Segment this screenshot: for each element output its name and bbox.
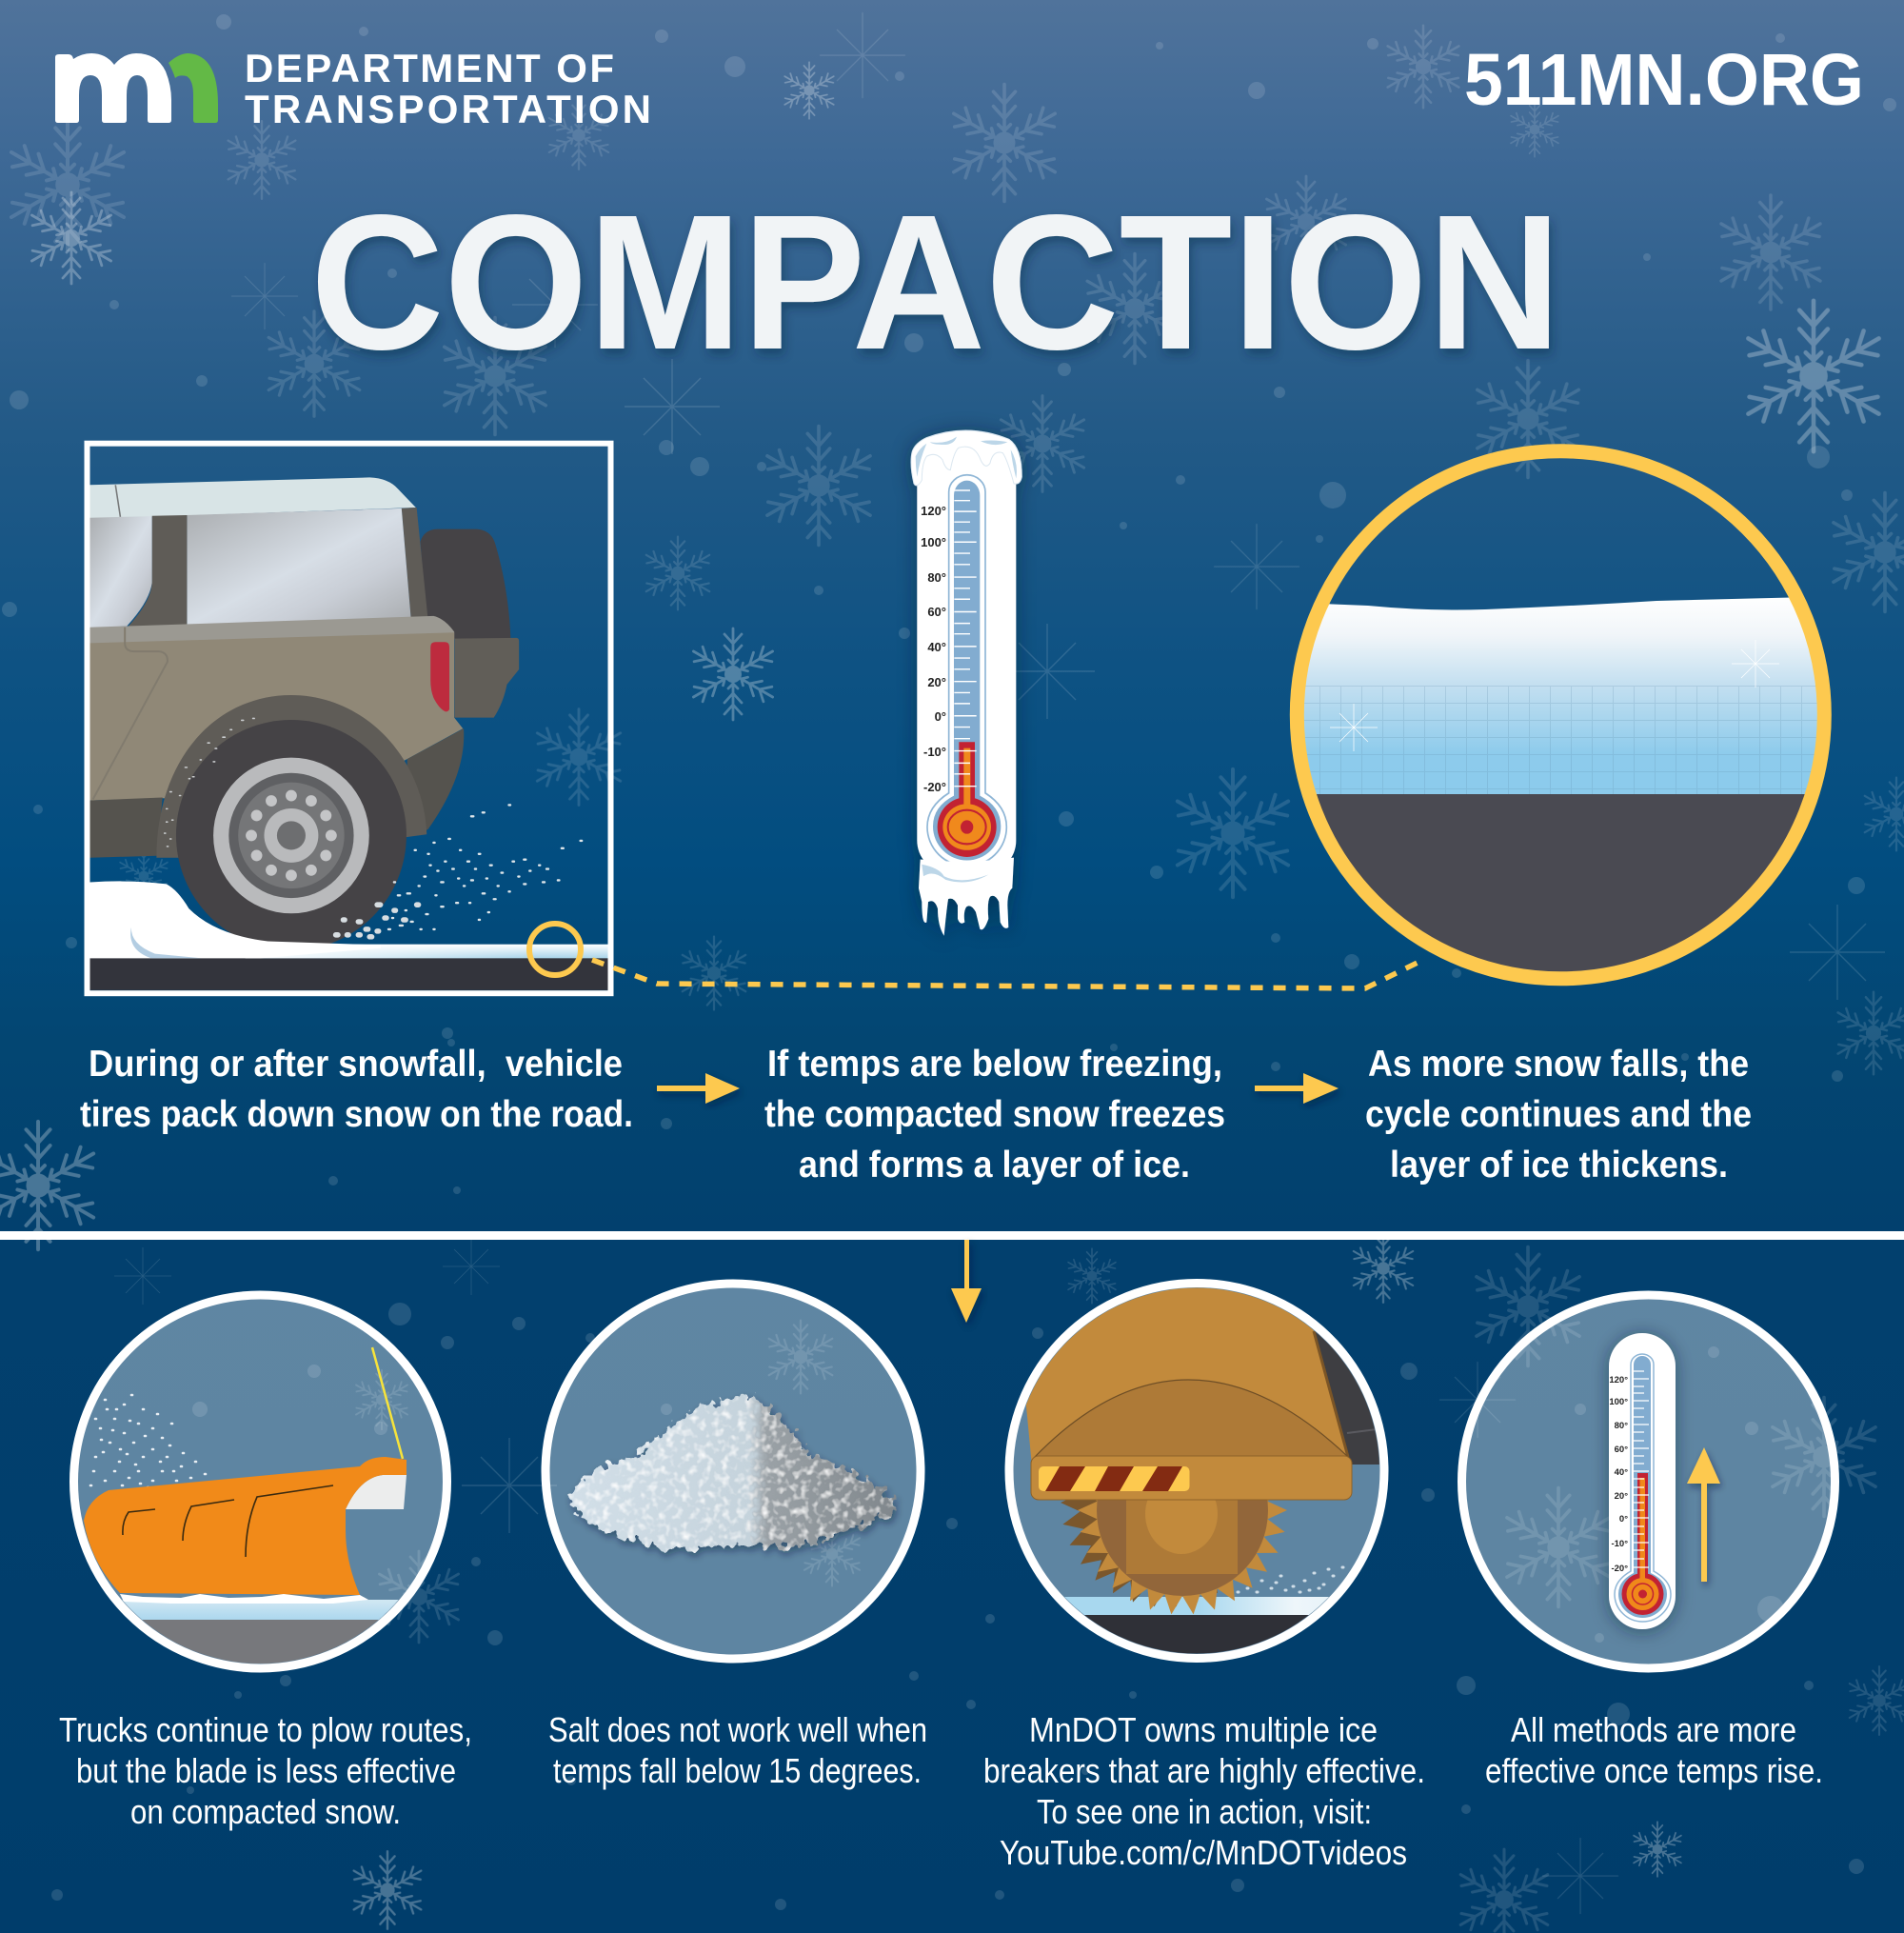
- caption: salt: temps fall below 15 degrees.: [553, 1751, 922, 1790]
- road: [89, 958, 608, 991]
- heading: department of transportation: TRANSPORTATION: [245, 87, 651, 131]
- step 2 text: If temps are below freezing,: [767, 1044, 1222, 1085]
- caption: plow: on compacted snow.: [130, 1792, 401, 1831]
- snow spray: [388, 805, 582, 929]
- pavement: [1317, 794, 1805, 971]
- arrow: step 2 to step 3: [1255, 1073, 1339, 1104]
- labels: 100°: [1609, 1397, 1628, 1407]
- labels: 120°: [1609, 1375, 1628, 1385]
- caption: temperature: [1485, 1710, 1823, 1790]
- plow snow spray: [90, 1395, 206, 1487]
- dark truck background: [1314, 1331, 1379, 1465]
- step 1 text: [80, 1044, 633, 1135]
- labels: -20°: [1611, 1564, 1628, 1574]
- antenna: [372, 1347, 403, 1459]
- cutter drum: [1097, 1425, 1268, 1596]
- step 3 text: [1365, 1044, 1752, 1186]
- small thermometer: [1609, 1333, 1676, 1629]
- caption: ice breakers: [983, 1710, 1425, 1872]
- callout ring on road: [529, 924, 581, 975]
- mercury: [938, 742, 997, 857]
- ticks: [1634, 1371, 1649, 1567]
- moldboard: [346, 1475, 407, 1509]
- caption: plow: [59, 1710, 472, 1831]
- arrow: temperature rising: [1687, 1447, 1720, 1582]
- icicles: [919, 858, 1014, 936]
- compacted snow layer: [89, 881, 608, 958]
- labels: 0°: [1619, 1514, 1628, 1524]
- center thermometer: [911, 430, 1021, 936]
- vehicle windows and pillars: [89, 508, 427, 628]
- thermometer scale labels: 20°: [927, 675, 946, 689]
- snow cap: [911, 430, 1021, 486]
- logo: Minnesota DOT mark: [55, 53, 218, 123]
- caption: salt: [548, 1710, 927, 1790]
- drum hub: [1145, 1474, 1218, 1554]
- panel: rising temperature circle: [1462, 1295, 1835, 1668]
- ice band: [1304, 598, 1817, 794]
- caption: ice breakers: To see one in action, visit:: [1037, 1792, 1372, 1831]
- labels: -10°: [1611, 1539, 1628, 1549]
- caption: salt: Salt does not work well when: [548, 1710, 927, 1749]
- thermometer scale labels: 120°: [921, 504, 946, 518]
- caption: plow: Trucks continue to plow routes,: [59, 1710, 472, 1749]
- thermometer scale labels: 80°: [927, 570, 946, 585]
- front band: [1031, 1456, 1352, 1500]
- wheel arch: [156, 695, 426, 858]
- caption: ice breakers: breakers that are highly effective.: [983, 1751, 1425, 1790]
- arrow: step 1 to step 2: [657, 1073, 740, 1104]
- thermometer scale labels: 40°: [927, 640, 946, 654]
- bumper: [455, 638, 519, 718]
- white ring: [545, 1284, 921, 1659]
- labels: 60°: [1615, 1445, 1628, 1455]
- thermometer body: [917, 443, 1016, 871]
- step 3 text: layer of ice thickens.: [1390, 1145, 1728, 1186]
- blade creases: [123, 1485, 333, 1557]
- step 2 text: and forms a layer of ice.: [799, 1145, 1190, 1186]
- labels: 40°: [1615, 1467, 1628, 1478]
- ice layer: [122, 1600, 398, 1620]
- plow blade: [84, 1457, 407, 1595]
- website url: 511MN.ORG: [1464, 39, 1864, 121]
- step 3 text: As more snow falls, the: [1368, 1044, 1749, 1085]
- labels: 20°: [1615, 1491, 1628, 1502]
- vehicle body: [89, 616, 464, 858]
- step 2 text: [764, 1044, 1225, 1186]
- panel: ice layer close-up: [1276, 451, 1847, 994]
- step 1 text: During or after snowfall, vehicle: [89, 1044, 623, 1085]
- rear blade teeth: [1061, 1478, 1270, 1606]
- thermometer scale labels: -10°: [923, 745, 946, 759]
- tail light: [430, 642, 449, 711]
- white frame: [88, 444, 611, 993]
- thermometer scale labels: 100°: [921, 535, 946, 549]
- hood arc panel: [1035, 1380, 1348, 1457]
- white ring: [74, 1295, 447, 1668]
- panel: plow circle: [57, 1295, 457, 1686]
- hazard stripes: [1039, 1466, 1190, 1491]
- panel: salt circle: [545, 1284, 921, 1659]
- pavement: [1009, 1615, 1390, 1672]
- caption: temperature: effective once temps rise.: [1485, 1751, 1823, 1790]
- white ring: [1462, 1295, 1835, 1668]
- labels: [1609, 1375, 1628, 1574]
- panel: ice breaker circle: [1009, 1276, 1399, 1672]
- sparkle: [1732, 640, 1779, 688]
- dashed connector: [592, 959, 1425, 988]
- heading: department of transportation: DEPARTMENT OF: [245, 46, 614, 90]
- tube and bulb outline: [927, 475, 1006, 867]
- pavement: [143, 1620, 379, 1664]
- title: COMPACTION: [310, 174, 1561, 389]
- labels: 80°: [1615, 1421, 1628, 1431]
- mercury: [1622, 1473, 1664, 1615]
- yellow ring: [1297, 451, 1824, 979]
- tire and wheel: [176, 720, 407, 950]
- thermometer scale labels: 60°: [927, 605, 946, 619]
- salt pile: [568, 1392, 897, 1550]
- step 3 text: cycle continues and the: [1365, 1094, 1752, 1135]
- panel: vehicle packing snow: [88, 444, 611, 993]
- heading: department of transportation: [245, 46, 651, 131]
- step 1 text: tires pack down snow on the road.: [80, 1094, 633, 1135]
- vehicle roof: [89, 477, 416, 519]
- snow edge: [120, 1594, 368, 1604]
- caption: ice breakers: MnDOT owns multiple ice: [1029, 1710, 1378, 1749]
- front blade teeth: [1078, 1485, 1287, 1614]
- spray: [1238, 1567, 1343, 1592]
- spare tire: [421, 529, 510, 639]
- arrow: down to solutions: [951, 1240, 982, 1323]
- caption: temperature: All methods are more: [1511, 1710, 1796, 1749]
- thermometer ticks: [954, 490, 977, 787]
- ice layer: [1064, 1597, 1329, 1615]
- caption: plow: but the blade is less effective: [76, 1751, 456, 1790]
- caption: ice breakers: YouTube.com/c/MnDOTvideos: [1000, 1833, 1407, 1872]
- thermometer scale labels: -20°: [923, 780, 946, 794]
- hood: [1009, 1276, 1348, 1466]
- step 2 text: the compacted snow freezes: [764, 1094, 1225, 1135]
- sparkle small: [1330, 704, 1378, 751]
- tube: [1615, 1354, 1671, 1622]
- thermometer scale labels: [921, 504, 946, 794]
- thermometer scale labels: 0°: [935, 709, 946, 724]
- drum mount: [1126, 1495, 1238, 1574]
- white ring: [1009, 1284, 1384, 1659]
